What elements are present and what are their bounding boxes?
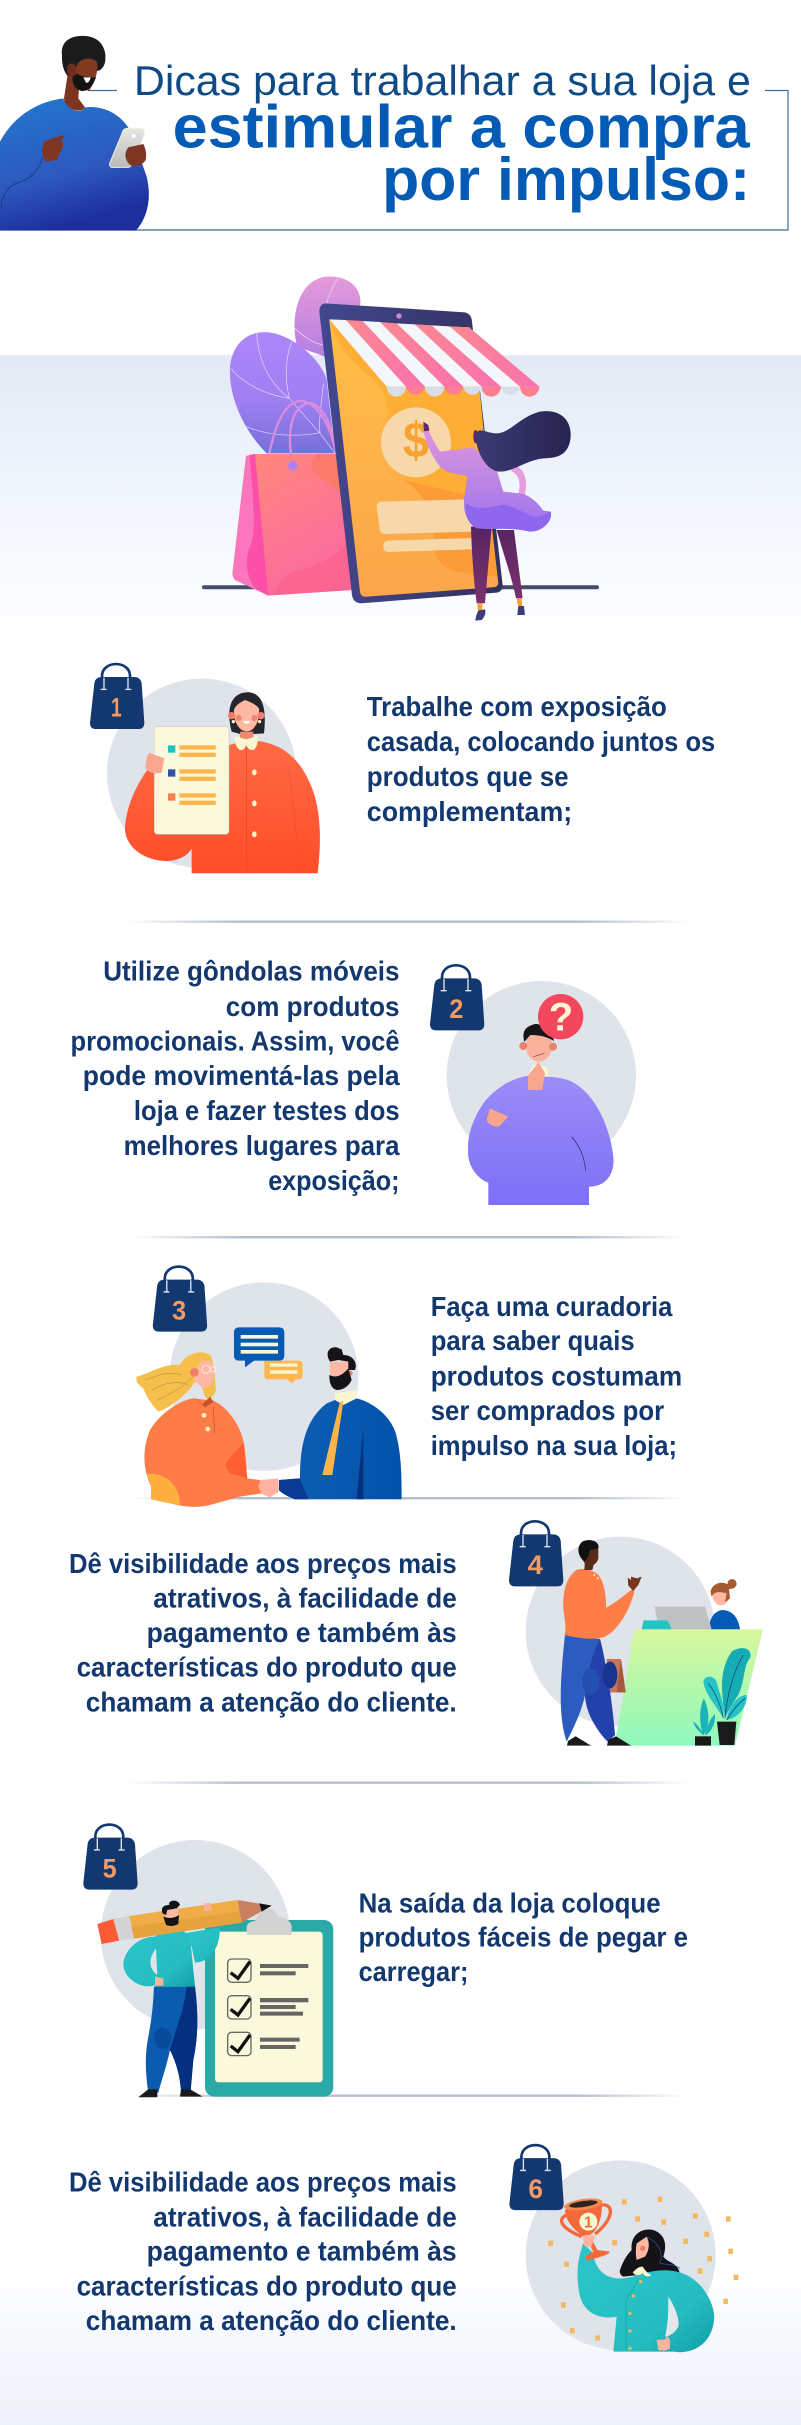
text: tip 2: pode movimentá-las pela xyxy=(83,1060,400,1091)
divider 3 xyxy=(128,1497,689,1499)
badge: bag number 3: 3 xyxy=(172,1295,186,1325)
illustration: customer at counter xyxy=(526,1537,763,1746)
text: tip 1 xyxy=(367,691,715,827)
illustration: woman holding list xyxy=(107,679,320,873)
text: tip 3: produtos costumam xyxy=(431,1360,682,1391)
text: tip 6: atrativos, à facilidade de xyxy=(153,2202,457,2232)
trophy number: 1 xyxy=(584,2214,593,2231)
badge: bag number 5 xyxy=(83,1825,138,1890)
text: tip 5: Na saída da loja coloque xyxy=(359,1887,661,1918)
text: tip 3: Faça uma curadoria xyxy=(431,1291,673,1322)
text: tip 6: pagamento e também às xyxy=(147,2236,457,2266)
badge: bag number 1 xyxy=(90,664,144,729)
badge: bag number 4 xyxy=(509,1521,563,1586)
badge: bag number 2 xyxy=(430,965,484,1030)
text: tip 3: ser comprados por xyxy=(431,1395,664,1426)
badge: bag number 6: 6 xyxy=(528,2174,543,2204)
text: tip 2: Utilize gôndolas móveis xyxy=(103,956,399,987)
tip 6 xyxy=(69,2145,738,2352)
header frame lines xyxy=(88,90,788,230)
text: tip 6 xyxy=(69,2167,457,2336)
text: tip 4: chamam a atenção do cliente. xyxy=(86,1686,457,1718)
title: estimular a compra xyxy=(173,94,750,161)
badge: bag number 4: 4 xyxy=(528,1550,543,1580)
text: tip 4: características do produto que xyxy=(77,1652,457,1683)
divider 1 xyxy=(128,920,689,923)
text: tip 4: Dê visibilidade aos preços mais xyxy=(69,1548,457,1579)
dollar sign: $ xyxy=(403,413,429,469)
text: tip 2 xyxy=(70,956,400,1196)
badge: bag number 3 xyxy=(153,1267,207,1332)
text: tip 1: produtos que se xyxy=(367,761,569,792)
text: tip 6: chamam a atenção do cliente. xyxy=(86,2305,457,2336)
text: tip 3 xyxy=(431,1291,682,1461)
divider 5 xyxy=(128,2094,689,2097)
badge: bag number 2: 2 xyxy=(449,994,463,1024)
tip 5 xyxy=(83,1825,688,2097)
text: tip 1: Trabalhe com exposição xyxy=(367,691,667,722)
text: tip 2: exposição; xyxy=(268,1165,400,1196)
text: tip 1: casada, colocando juntos os xyxy=(367,726,715,757)
text: tip 5: produtos fáceis de pegar e xyxy=(359,1922,688,1953)
text: tip 3: impulso na sua loja; xyxy=(431,1430,677,1461)
text: tip 4: atrativos, à facilidade de xyxy=(153,1582,457,1613)
title xyxy=(134,57,751,213)
illustration: man with pencil and checklist xyxy=(97,1840,333,2097)
text: tip 6: Dê visibilidade aos preços mais xyxy=(69,2167,457,2198)
text: tip 2: com produtos xyxy=(226,991,400,1022)
tip 2 xyxy=(70,956,636,1205)
text: tip 5: carregar; xyxy=(359,1956,468,1987)
title: Dicas para trabalhar a sua loja e xyxy=(134,57,751,104)
text: tip 5 xyxy=(359,1887,688,1987)
text: tip 6: características do produto que xyxy=(77,2271,457,2302)
bottom background band xyxy=(0,2260,801,2425)
text: tip 3: para saber quais xyxy=(431,1325,635,1356)
text: tip 2: promocionais. Assim, você xyxy=(70,1025,400,1056)
badge: bag number 5: 5 xyxy=(103,1853,117,1883)
text: tip 2: loja e fazer testes dos xyxy=(134,1095,400,1126)
tip 3 xyxy=(136,1267,682,1507)
hero illustration: tablet shop, bag, woman xyxy=(202,277,599,621)
illustration: thinking man xyxy=(447,981,636,1205)
tip 4 xyxy=(69,1521,763,1746)
title: por impulso: xyxy=(382,146,750,213)
divider 4 xyxy=(128,1782,689,1784)
illustration: woman with trophy xyxy=(526,2160,738,2352)
top background band xyxy=(0,355,801,650)
icon: man with phone xyxy=(0,36,149,231)
text: tip 4: pagamento e também às xyxy=(147,1617,457,1648)
text: tip 1: complementam; xyxy=(367,796,572,827)
badge: bag number 1: 1 xyxy=(111,693,122,723)
question mark: ? xyxy=(549,996,573,1040)
badge: bag number 6 xyxy=(509,2145,564,2210)
text: tip 2: melhores lugares para xyxy=(124,1130,400,1161)
illustration: handshake conversation xyxy=(136,1282,402,1507)
tip 1 xyxy=(90,664,715,873)
text: tip 4 xyxy=(69,1548,457,1718)
divider 2 xyxy=(128,1236,689,1238)
